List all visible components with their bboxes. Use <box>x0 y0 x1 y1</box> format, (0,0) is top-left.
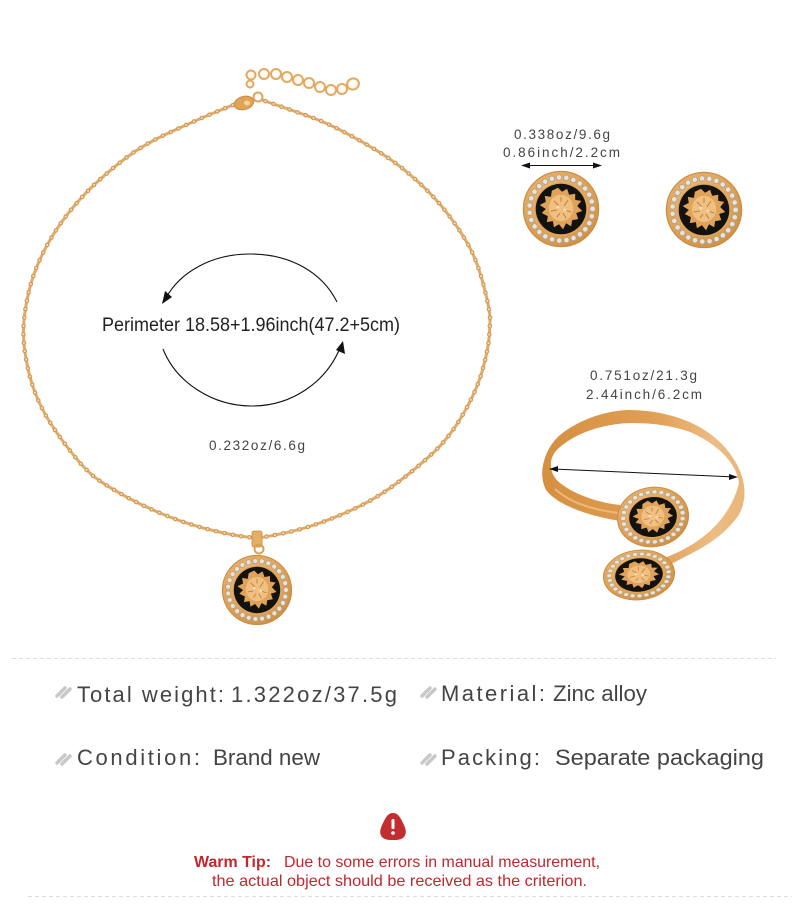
warm tip text <box>194 854 600 890</box>
bullet icon <box>422 755 435 764</box>
spec: total weight <box>57 682 397 707</box>
spec: condition: Brand new <box>213 745 320 770</box>
bracelet width arrow <box>549 466 738 480</box>
bracelet highlight <box>555 489 618 513</box>
right earring <box>666 172 742 248</box>
spec: material: Material: <box>441 681 545 706</box>
necklace <box>23 69 490 625</box>
earring width arrow <box>521 162 602 168</box>
pendant bail <box>252 531 264 554</box>
warm tip text: Warm Tip: <box>194 854 271 871</box>
bracelet labels <box>586 368 702 402</box>
earring labels: 0.86inch/2.2cm <box>503 145 620 160</box>
spec: condition: Condition: <box>77 745 200 770</box>
bracelet labels: 2.44inch/6.2cm <box>586 387 702 402</box>
perimeter label: Perimeter 18.58+1.96inch(47.2+5cm) <box>102 315 400 336</box>
pendant medallion <box>222 555 292 625</box>
bullet icon <box>422 688 435 697</box>
divider bottom <box>28 896 792 898</box>
lower bracelet medallion <box>601 546 677 604</box>
spec: material <box>422 681 647 706</box>
perimeter arrows <box>162 254 345 406</box>
lower arc arrow <box>163 341 345 406</box>
spec: condition <box>57 745 320 770</box>
necklace weight label: 0.232oz/6.6g <box>209 438 305 453</box>
earring labels: 0.338oz/9.6g <box>514 127 610 142</box>
upper bracelet medallion <box>613 482 693 552</box>
spec: total weight: 1.322oz/37.5g <box>231 682 397 707</box>
bracelet labels: 0.751oz/21.3g <box>590 368 697 383</box>
bullet icon <box>57 755 70 764</box>
warm tip text: Due to some errors in manual measurement, <box>284 854 600 871</box>
chain extender <box>246 69 361 95</box>
warm tip text: the actual object should be received as the criterion. <box>212 873 587 890</box>
divider top <box>12 658 776 660</box>
bullet icon <box>57 688 70 697</box>
spec: packing: Packing: <box>441 745 540 770</box>
bracelet band <box>542 410 745 566</box>
upper arc arrow <box>162 254 337 304</box>
spec: packing: Separate packaging <box>555 745 764 770</box>
left earring <box>523 171 599 247</box>
warning icon <box>380 813 406 840</box>
necklace chain <box>23 100 490 538</box>
spec: material: Zinc alloy <box>553 681 647 706</box>
lobster clasp <box>233 92 262 112</box>
bracelet <box>542 410 745 604</box>
spec: total weight: Total weight: <box>77 682 224 707</box>
spec: packing <box>422 745 764 770</box>
earring labels <box>503 127 620 160</box>
